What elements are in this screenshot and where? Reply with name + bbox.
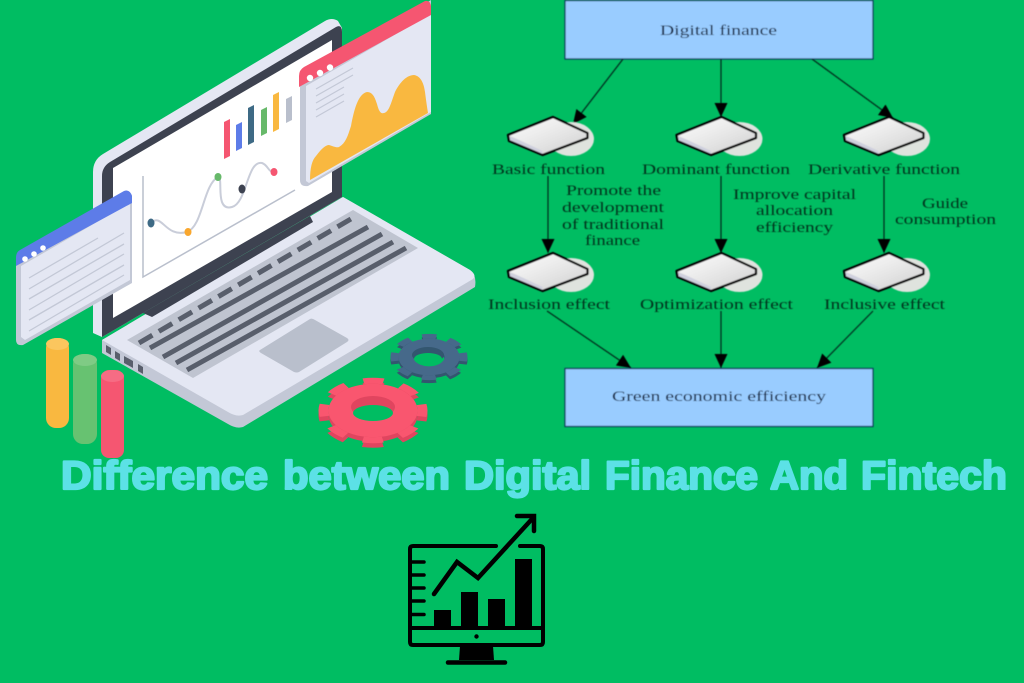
touchpad (259, 319, 348, 372)
diagram labels: Promote the (566, 183, 661, 199)
keyboard (127, 210, 418, 378)
diagram labels: Derivative function (808, 162, 961, 178)
diagram labels: Basic function (492, 162, 606, 178)
window: text lines (16, 191, 132, 345)
diagram labels: consumption (895, 212, 997, 228)
server icons, bottom row (508, 253, 930, 292)
laptop lid (93, 19, 342, 337)
gear: red (315, 375, 431, 450)
diagram labels: of traditional (562, 217, 664, 233)
server icon: derivative function (844, 117, 930, 156)
box: Green economic efficiency: Green economic efficiency (612, 389, 827, 405)
box: Digital finance: Digital finance (660, 23, 777, 39)
server icons, top row (508, 117, 930, 156)
laptop base (102, 197, 475, 428)
window: area chart (299, 0, 431, 186)
diagram labels (488, 162, 997, 313)
server icon: basic function (508, 117, 594, 156)
server icon: inclusion effect (508, 253, 594, 292)
icon: monitor with growth chart (410, 516, 543, 662)
title: between (283, 454, 450, 498)
cylinder: red (101, 370, 124, 458)
screen bar chart (224, 92, 292, 159)
server icon: inclusive effect (844, 253, 930, 292)
cylinder: green (73, 354, 97, 444)
arrows (547, 59, 893, 368)
title: Fintech (861, 454, 1007, 498)
area chart fill (310, 75, 428, 180)
diagram labels: allocation (756, 203, 834, 219)
gear: blue (388, 333, 470, 384)
title: And (770, 454, 848, 498)
server icon: optimization effect (676, 253, 762, 292)
screen line chart (143, 163, 295, 277)
diagram labels: Improve capital (733, 187, 856, 203)
title: Difference (61, 454, 268, 498)
diagram labels: Guide (922, 196, 968, 212)
flow diagram (488, 0, 997, 426)
diagram labels: efficiency (756, 220, 834, 236)
illustration: laptop with charts (16, 0, 475, 458)
diagram labels: Inclusion effect (488, 297, 610, 313)
laptop ports (106, 345, 143, 374)
title: Finance (605, 454, 758, 498)
diagram labels: development (562, 200, 664, 216)
box: Digital finance (565, 0, 873, 59)
diagram labels: Optimization effect (640, 297, 793, 313)
cylinder: yellow (46, 338, 69, 428)
diagram labels: finance (585, 233, 640, 249)
title (61, 454, 1007, 498)
diagram labels: Inclusive effect (824, 297, 945, 313)
server icon: dominant function (676, 117, 762, 156)
box: Green economic efficiency (565, 368, 873, 426)
title: Digital (464, 454, 591, 498)
diagram labels: Dominant function (642, 162, 791, 178)
